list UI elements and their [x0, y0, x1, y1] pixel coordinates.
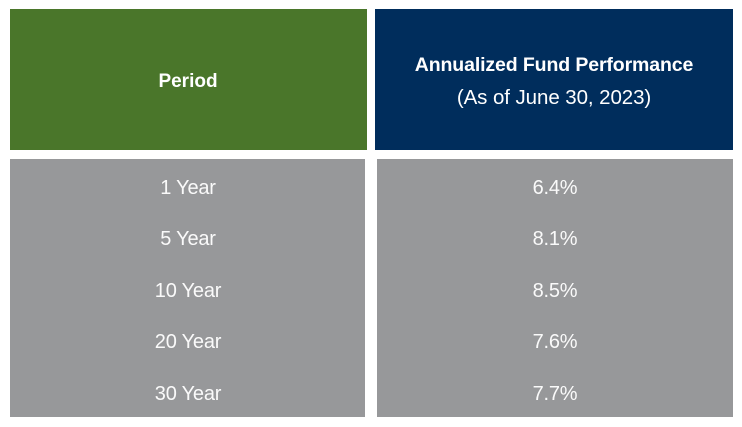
- header cell: period: [10, 9, 367, 150]
- value: 1 year performance: 6.4%: [533, 177, 577, 199]
- period: 10 year: 10 Year: [155, 280, 221, 302]
- period: 20 year: 20 Year: [155, 331, 221, 353]
- value: 20 year performance: 7.6%: [533, 331, 577, 353]
- period: 30 year: 30 Year: [155, 383, 221, 405]
- subheading: as-of date: (As of June 30, 2023): [457, 86, 651, 109]
- heading: annualized fund performance: Annualized Fund Performance: [415, 54, 693, 76]
- period: 5 year: 5 Year: [160, 228, 216, 250]
- period: 1 year: 1 Year: [160, 177, 216, 199]
- value: 5 year performance: 8.1%: [533, 228, 577, 250]
- value: 10 year performance: 8.5%: [533, 280, 577, 302]
- column: periods: [10, 159, 365, 417]
- value: 30 year performance: 7.7%: [533, 383, 577, 405]
- heading: period: Period: [158, 71, 218, 92]
- column: performance values: [377, 159, 733, 417]
- header cell: annualized fund performance: [375, 9, 733, 150]
